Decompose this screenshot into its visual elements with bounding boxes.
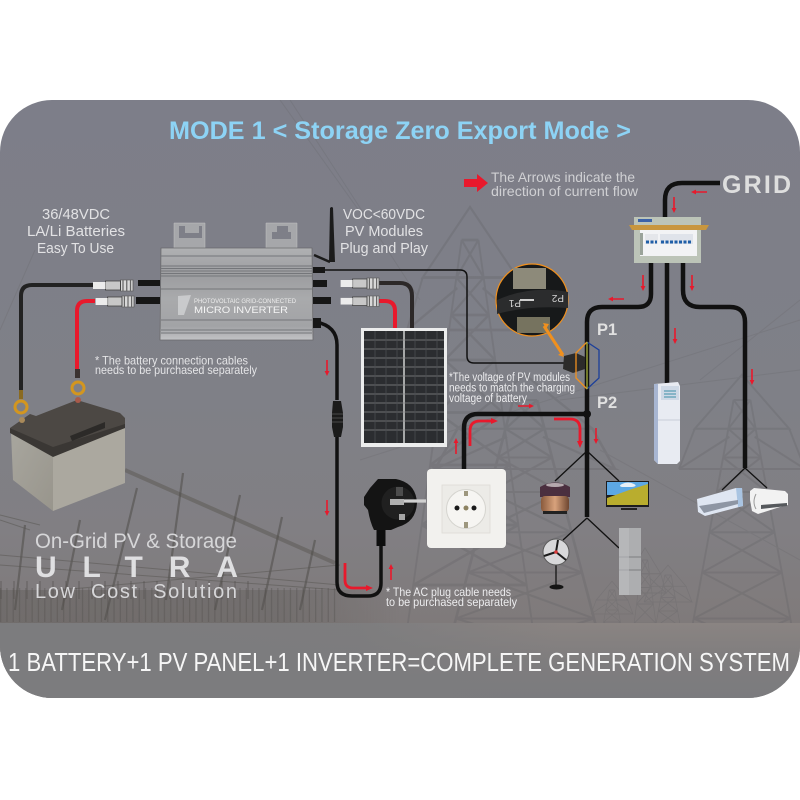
icon: magnified CT clamp: P2	[551, 292, 564, 303]
note: battery cables: * The battery connection cables	[95, 354, 248, 368]
icon: wall socket	[427, 469, 506, 548]
junction dot	[583, 410, 591, 418]
background: silhouette of pylons	[0, 470, 340, 620]
icon: magnified CT clamp	[496, 264, 568, 336]
connector: battery positive	[96, 296, 134, 307]
background: power towers	[0, 100, 800, 623]
legend: arrow meaning	[464, 169, 639, 199]
label: battery spec	[27, 206, 125, 257]
flow arrowheads	[366, 418, 583, 591]
background: bottom band left tone	[0, 623, 430, 698]
label: GRID: GRID	[722, 171, 791, 199]
slogan: on-grid ultra low cost: On-Grid PV & Storage	[35, 530, 237, 553]
icon: tower air conditioner	[654, 382, 680, 464]
note: AC plug cable	[386, 585, 517, 609]
icon: rice cooker	[540, 482, 570, 514]
note: battery cables: needs to be purchased separately	[95, 363, 257, 377]
flow arrows: large curved red	[345, 419, 580, 588]
icon: battery terminal rings	[15, 369, 84, 413]
icon: clamp outline	[576, 342, 599, 389]
title: MODE 1 < Storage Zero Export Mode >	[169, 117, 631, 145]
note: AC plug cable: to be purchased separately	[386, 595, 517, 609]
note: PV voltage: *The voltage of PV modules	[449, 372, 570, 384]
note: PV voltage: needs to match the charging	[449, 382, 575, 394]
slogan: on-grid ultra low cost: Low Cost Solution	[35, 581, 237, 603]
icon: schuko plug	[364, 479, 426, 546]
flow arrows: small red	[325, 190, 754, 580]
background: bottom band	[0, 623, 800, 698]
icon: CT clamp	[563, 353, 585, 373]
connector: inline AC coupler	[332, 401, 343, 437]
note: PV voltage: voltage of battery	[449, 393, 527, 405]
icon: battery	[10, 397, 125, 511]
cable: red PV positive	[378, 301, 395, 328]
icon: television	[606, 481, 649, 509]
connector: battery negative	[93, 280, 133, 291]
connector: PV positive	[341, 296, 379, 306]
icon: micro inverter: PHOTOVOLTAIC GRID-CONNECTED	[194, 298, 296, 305]
cables: AC, grid and load wiring	[21, 183, 767, 596]
slogan: on-grid ultra low cost	[35, 530, 238, 603]
label: PV spec	[340, 206, 428, 257]
label: PV spec: PV Modules	[345, 223, 423, 240]
icon: magnified CT clamp: P1	[508, 297, 521, 308]
label: battery spec: Easy To Use	[37, 240, 114, 257]
slogan: on-grid ultra low cost: ULTRA	[35, 551, 238, 584]
icon: air conditioner left	[697, 488, 743, 516]
panel: background	[0, 100, 800, 703]
connector: PV negative	[341, 278, 379, 289]
label: P2: P2	[597, 394, 617, 412]
icon: refrigerator	[619, 528, 641, 595]
label: PV spec: Plug and Play	[340, 240, 428, 257]
cable: red battery positive	[77, 301, 95, 370]
note: AC plug cable: * The AC plug cable needs	[386, 585, 511, 599]
label: PV spec: VOC<60VDC	[343, 206, 425, 223]
note: battery cables	[95, 354, 257, 377]
legend: arrow meaning: direction of current flow	[491, 183, 639, 199]
icon: micro inverter	[136, 207, 335, 340]
label: battery spec: 36/48VDC	[42, 206, 110, 223]
icon: distribution box	[629, 217, 709, 263]
background: lower horizon shading	[0, 590, 340, 623]
icon: stand fan	[543, 539, 569, 590]
arrow: orange pointer	[543, 323, 564, 357]
note: PV voltage	[449, 372, 575, 405]
label: P1: P1	[597, 321, 617, 339]
icon: micro inverter: MICRO INVERTER	[194, 305, 288, 316]
icon: solar panel	[361, 328, 447, 447]
icon: air conditioner right	[750, 488, 788, 514]
label: battery spec: LA/Li Batteries	[27, 223, 125, 240]
legend: arrow meaning: The Arrows indicate the	[491, 169, 635, 185]
